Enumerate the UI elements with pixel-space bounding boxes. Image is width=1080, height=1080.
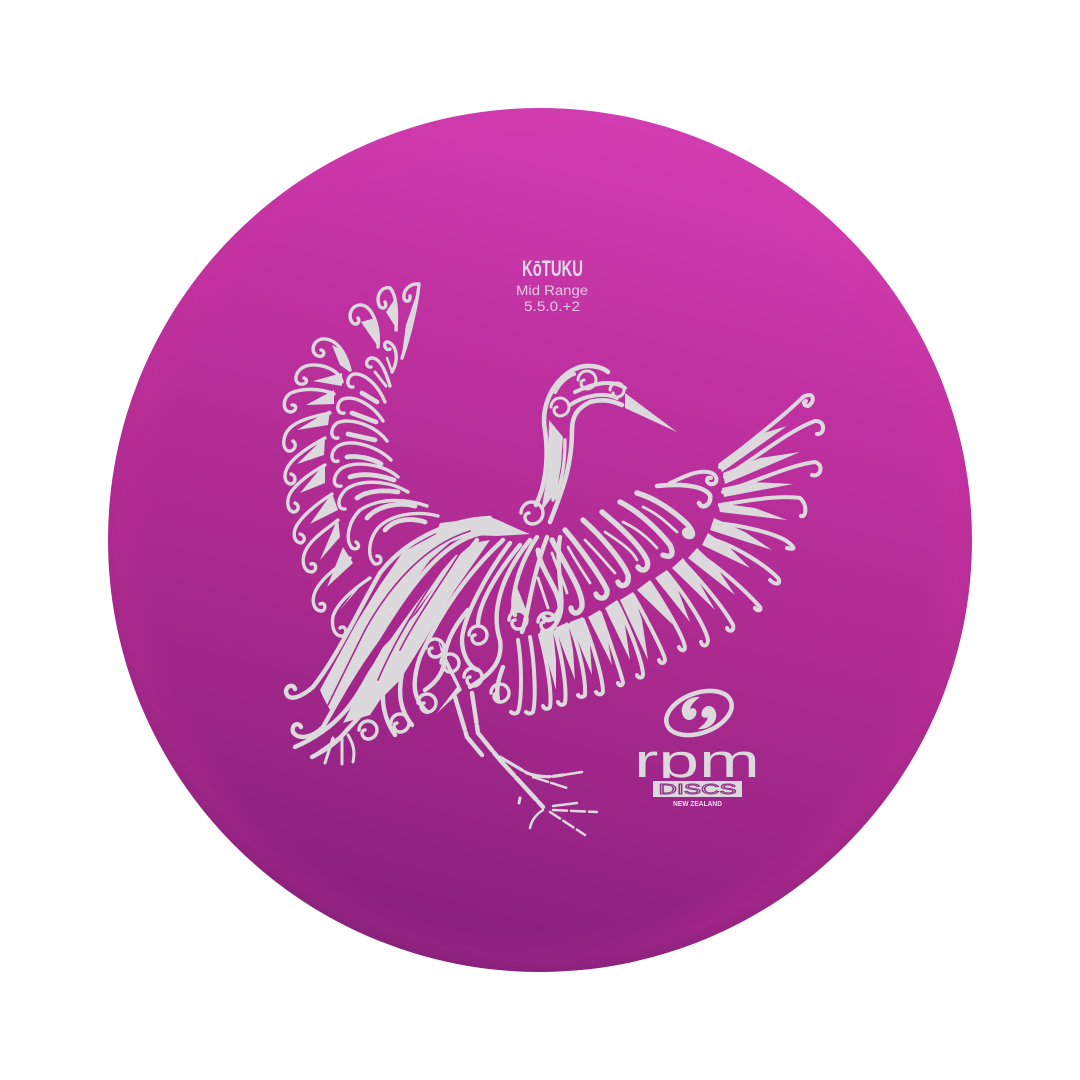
discs wordmark: DISCS xyxy=(658,781,736,798)
logo ring xyxy=(660,683,738,743)
right wing fan feathers xyxy=(511,395,823,714)
discs badge xyxy=(653,781,742,797)
right wing upper dashes xyxy=(538,507,677,608)
illustration: kotuku heron xyxy=(284,284,823,835)
new zealand label: NEW ZEALAND xyxy=(673,799,723,808)
right wing upper feathers xyxy=(538,472,716,620)
left wing inner feathers xyxy=(332,342,438,564)
neck swirl xyxy=(551,398,569,416)
rpm wordmark: rpm xyxy=(634,734,760,787)
left wing outer feathers xyxy=(284,284,419,636)
neck base swirl xyxy=(521,502,543,524)
rpm discs logo xyxy=(638,688,756,806)
plume masses xyxy=(320,525,470,710)
fill wedge xyxy=(437,640,462,713)
plume dark separators xyxy=(328,531,470,705)
body plumes xyxy=(286,517,561,764)
neck strips xyxy=(536,366,625,522)
head swirl front xyxy=(610,383,624,397)
beak xyxy=(625,393,677,432)
right wing xyxy=(511,395,823,714)
neck centre fill xyxy=(541,420,563,512)
left wing inner dashes xyxy=(347,358,425,530)
head swirl rear xyxy=(578,371,596,389)
plume strands xyxy=(286,518,561,764)
body swirls xyxy=(359,611,556,739)
neck and head xyxy=(521,366,677,524)
logo swirl xyxy=(682,697,716,729)
legs and feet xyxy=(455,693,597,835)
body small triangle xyxy=(510,587,527,612)
right wing fan wedges xyxy=(540,426,800,690)
disc body xyxy=(108,108,972,972)
shoulder mass xyxy=(430,517,530,550)
left wing xyxy=(284,284,438,636)
disc name: KōTUKU xyxy=(522,256,583,281)
product image: flying disc xyxy=(108,108,972,972)
left wing outer feather wedges xyxy=(297,284,420,610)
disc name and flight numbers xyxy=(516,256,588,314)
disc rim highlight xyxy=(108,108,972,972)
flight numbers: 5.5.0.+2 xyxy=(524,298,580,314)
disc type: Mid Range xyxy=(516,282,588,298)
